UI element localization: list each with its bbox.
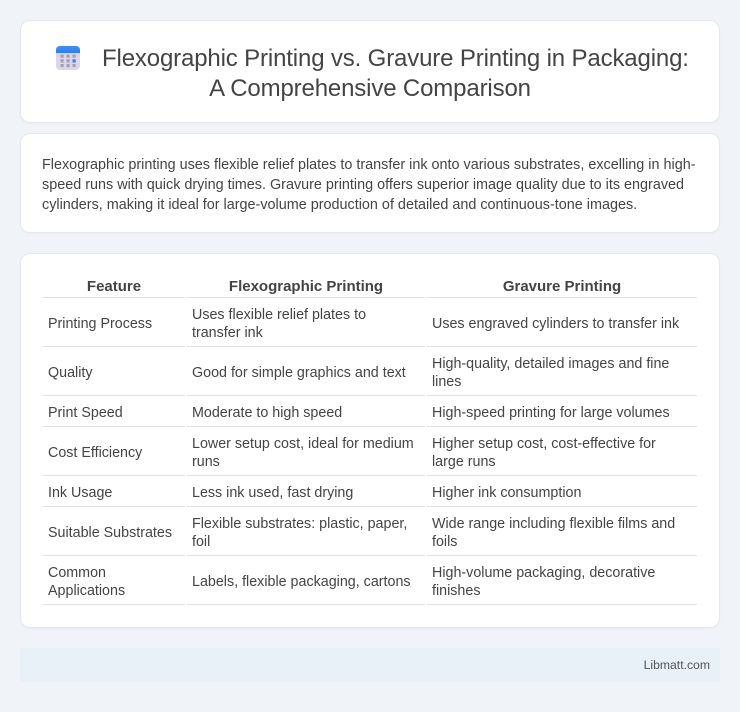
row: printing process: Uses flexible relief plates to xyxy=(192,307,366,323)
title: Flexographic Printing vs. Gravure Printing in Packaging: xyxy=(102,45,689,72)
row: cost efficiency: Higher setup cost, cost-effective for xyxy=(432,436,656,452)
panel: comparison table xyxy=(20,253,720,628)
row: suitable substrates: foils xyxy=(432,534,457,550)
row: cost efficiency: Cost Efficiency xyxy=(48,445,142,461)
row: print speed: High-speed printing for large volumes xyxy=(432,405,670,421)
row: suitable substrates: Wide range including flexible films and xyxy=(432,516,675,532)
row: quality: Quality xyxy=(48,365,92,381)
row: suitable substrates: Flexible substrates: plastic, paper, xyxy=(192,516,407,532)
row: ink usage: Ink Usage xyxy=(48,485,112,501)
row: printing process: transfer ink xyxy=(192,325,263,341)
footer bar xyxy=(20,648,720,682)
row: quality: lines xyxy=(432,374,461,390)
text block: introduction: speed runs with quick drying times. Gravure printing offers superior image quality due to its engraved xyxy=(42,177,684,193)
row: cost efficiency: large runs xyxy=(432,454,496,470)
title: A Comprehensive Comparison xyxy=(209,75,531,102)
footer credit: Libmatt.com xyxy=(644,658,710,672)
row: cost efficiency: runs xyxy=(192,454,220,470)
row: common applications: Common xyxy=(48,565,106,581)
row: common applications: High-volume packaging, decorative xyxy=(432,565,655,581)
row: printing process: Printing Process xyxy=(48,316,152,332)
row: suitable substrates xyxy=(48,516,675,550)
panel: introduction xyxy=(20,133,720,233)
row: ink usage: Higher ink consumption xyxy=(432,485,581,501)
title xyxy=(102,45,689,102)
row: cost efficiency xyxy=(48,436,656,470)
row: print speed xyxy=(48,405,670,421)
row: common applications: finishes xyxy=(432,583,480,599)
text block: introduction: cylinders, making it ideal for large-volume production of detailed and continuous-tone images. xyxy=(42,197,637,213)
column headers: Gravure Printing xyxy=(503,278,621,295)
icon: calendar grid xyxy=(56,46,80,70)
row: common applications: Labels, flexible packaging, cartons xyxy=(192,574,411,590)
column headers xyxy=(87,278,621,295)
row: cost efficiency: Lower setup cost, ideal for medium xyxy=(192,436,414,452)
row: ink usage xyxy=(48,485,581,501)
row: printing process: Uses engraved cylinders to transfer ink xyxy=(432,316,679,332)
row: common applications xyxy=(48,565,655,599)
row: common applications: Applications xyxy=(48,583,125,599)
row: ink usage: Less ink used, fast drying xyxy=(192,485,353,501)
column headers: Feature xyxy=(87,278,141,295)
row: suitable substrates: foil xyxy=(192,534,210,550)
text block: introduction xyxy=(42,157,696,213)
row: print speed: Print Speed xyxy=(48,405,123,421)
row: suitable substrates: Suitable Substrates xyxy=(48,525,172,541)
row: quality: High-quality, detailed images and fine xyxy=(432,356,669,372)
row: printing process xyxy=(48,307,680,341)
column headers: Flexographic Printing xyxy=(229,278,383,295)
panel: title card xyxy=(20,20,720,123)
row: quality xyxy=(48,356,669,390)
row: print speed: Moderate to high speed xyxy=(192,405,342,421)
text block: introduction: Flexographic printing uses flexible relief plates to transfer ink onto various substrates, excelling in high- xyxy=(42,157,696,173)
comparison table xyxy=(43,278,697,605)
row: quality: Good for simple graphics and text xyxy=(192,365,406,381)
